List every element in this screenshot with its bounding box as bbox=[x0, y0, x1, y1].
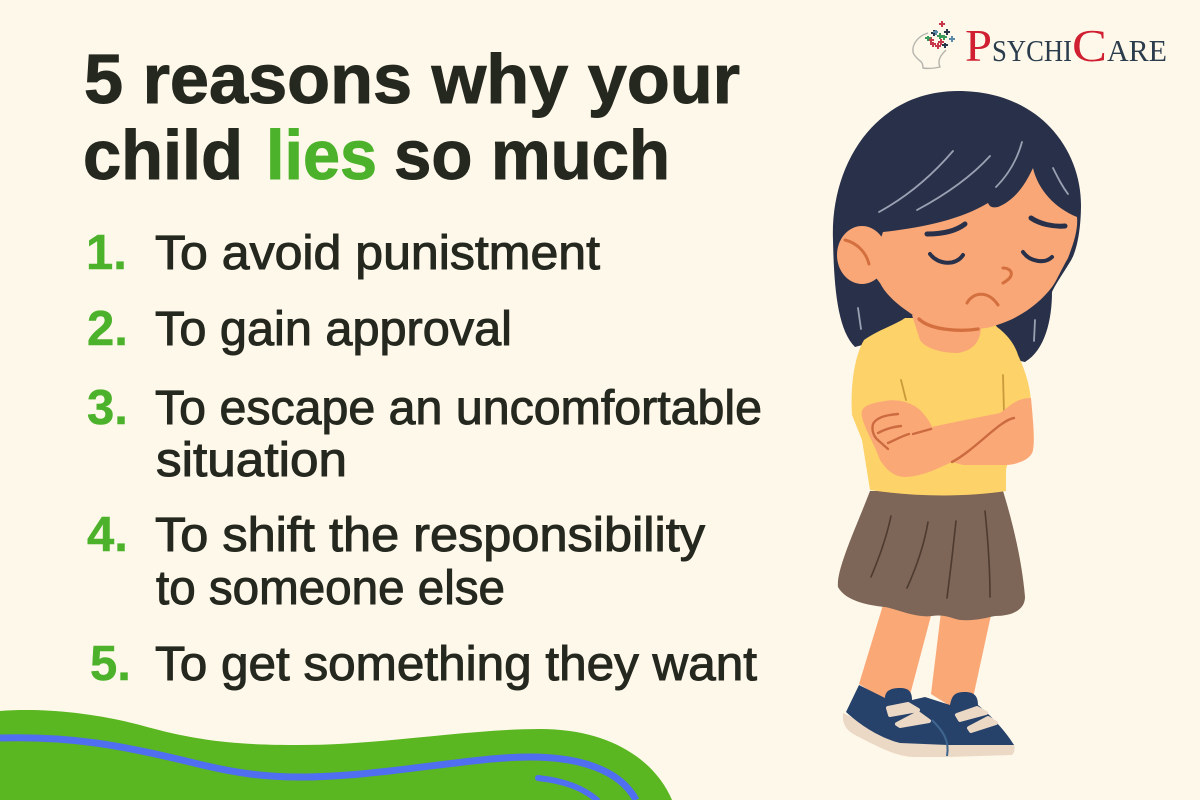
title: lies bbox=[266, 116, 377, 194]
green wave with blue lines bbox=[0, 710, 672, 800]
shoes bbox=[843, 685, 1015, 757]
reason 5: 5. bbox=[90, 637, 131, 691]
reason 1: 1. bbox=[86, 226, 127, 280]
hair highlights bbox=[858, 142, 1068, 341]
icon: head with coloured crosses bbox=[913, 21, 955, 68]
reason 4: to someone else bbox=[156, 562, 505, 615]
logo wordmark: C bbox=[1072, 20, 1107, 71]
illustration: sad girl with crossed arms bbox=[833, 91, 1081, 757]
legs bbox=[859, 605, 991, 706]
head: face and ear bbox=[837, 168, 1077, 329]
neck bbox=[912, 315, 981, 353]
title: so much bbox=[394, 116, 670, 194]
reason 4: 4. bbox=[87, 508, 128, 562]
shirt bbox=[852, 318, 1031, 495]
title: child bbox=[83, 116, 243, 194]
facial features bbox=[845, 218, 1065, 330]
reason 3 bbox=[87, 381, 762, 487]
reason 2: To gain approval bbox=[155, 303, 512, 356]
logo wordmark: P bbox=[965, 20, 992, 71]
reason 3: To escape an uncomfortable bbox=[155, 382, 762, 435]
reason 5: To get something they want bbox=[155, 638, 757, 691]
reason 4 bbox=[87, 508, 705, 615]
title bbox=[83, 40, 740, 194]
logo wordmark: SYCHI bbox=[992, 33, 1072, 68]
title: 5 reasons why your bbox=[84, 40, 740, 118]
back hair bbox=[833, 91, 1081, 362]
logo wordmark bbox=[965, 20, 1167, 71]
reason 4: To shift the responsibility bbox=[155, 509, 705, 562]
reason 1: To avoid punistment bbox=[155, 227, 600, 280]
crossed arms bbox=[862, 398, 1034, 477]
reason 3: 3. bbox=[87, 381, 128, 435]
numbered list of reasons bbox=[86, 226, 762, 691]
reason 2: 2. bbox=[87, 302, 128, 356]
reason 3: situation bbox=[156, 434, 347, 487]
logo: PsychiCare bbox=[913, 20, 1167, 71]
logo wordmark: ARE bbox=[1107, 33, 1167, 68]
skirt bbox=[838, 491, 1025, 620]
